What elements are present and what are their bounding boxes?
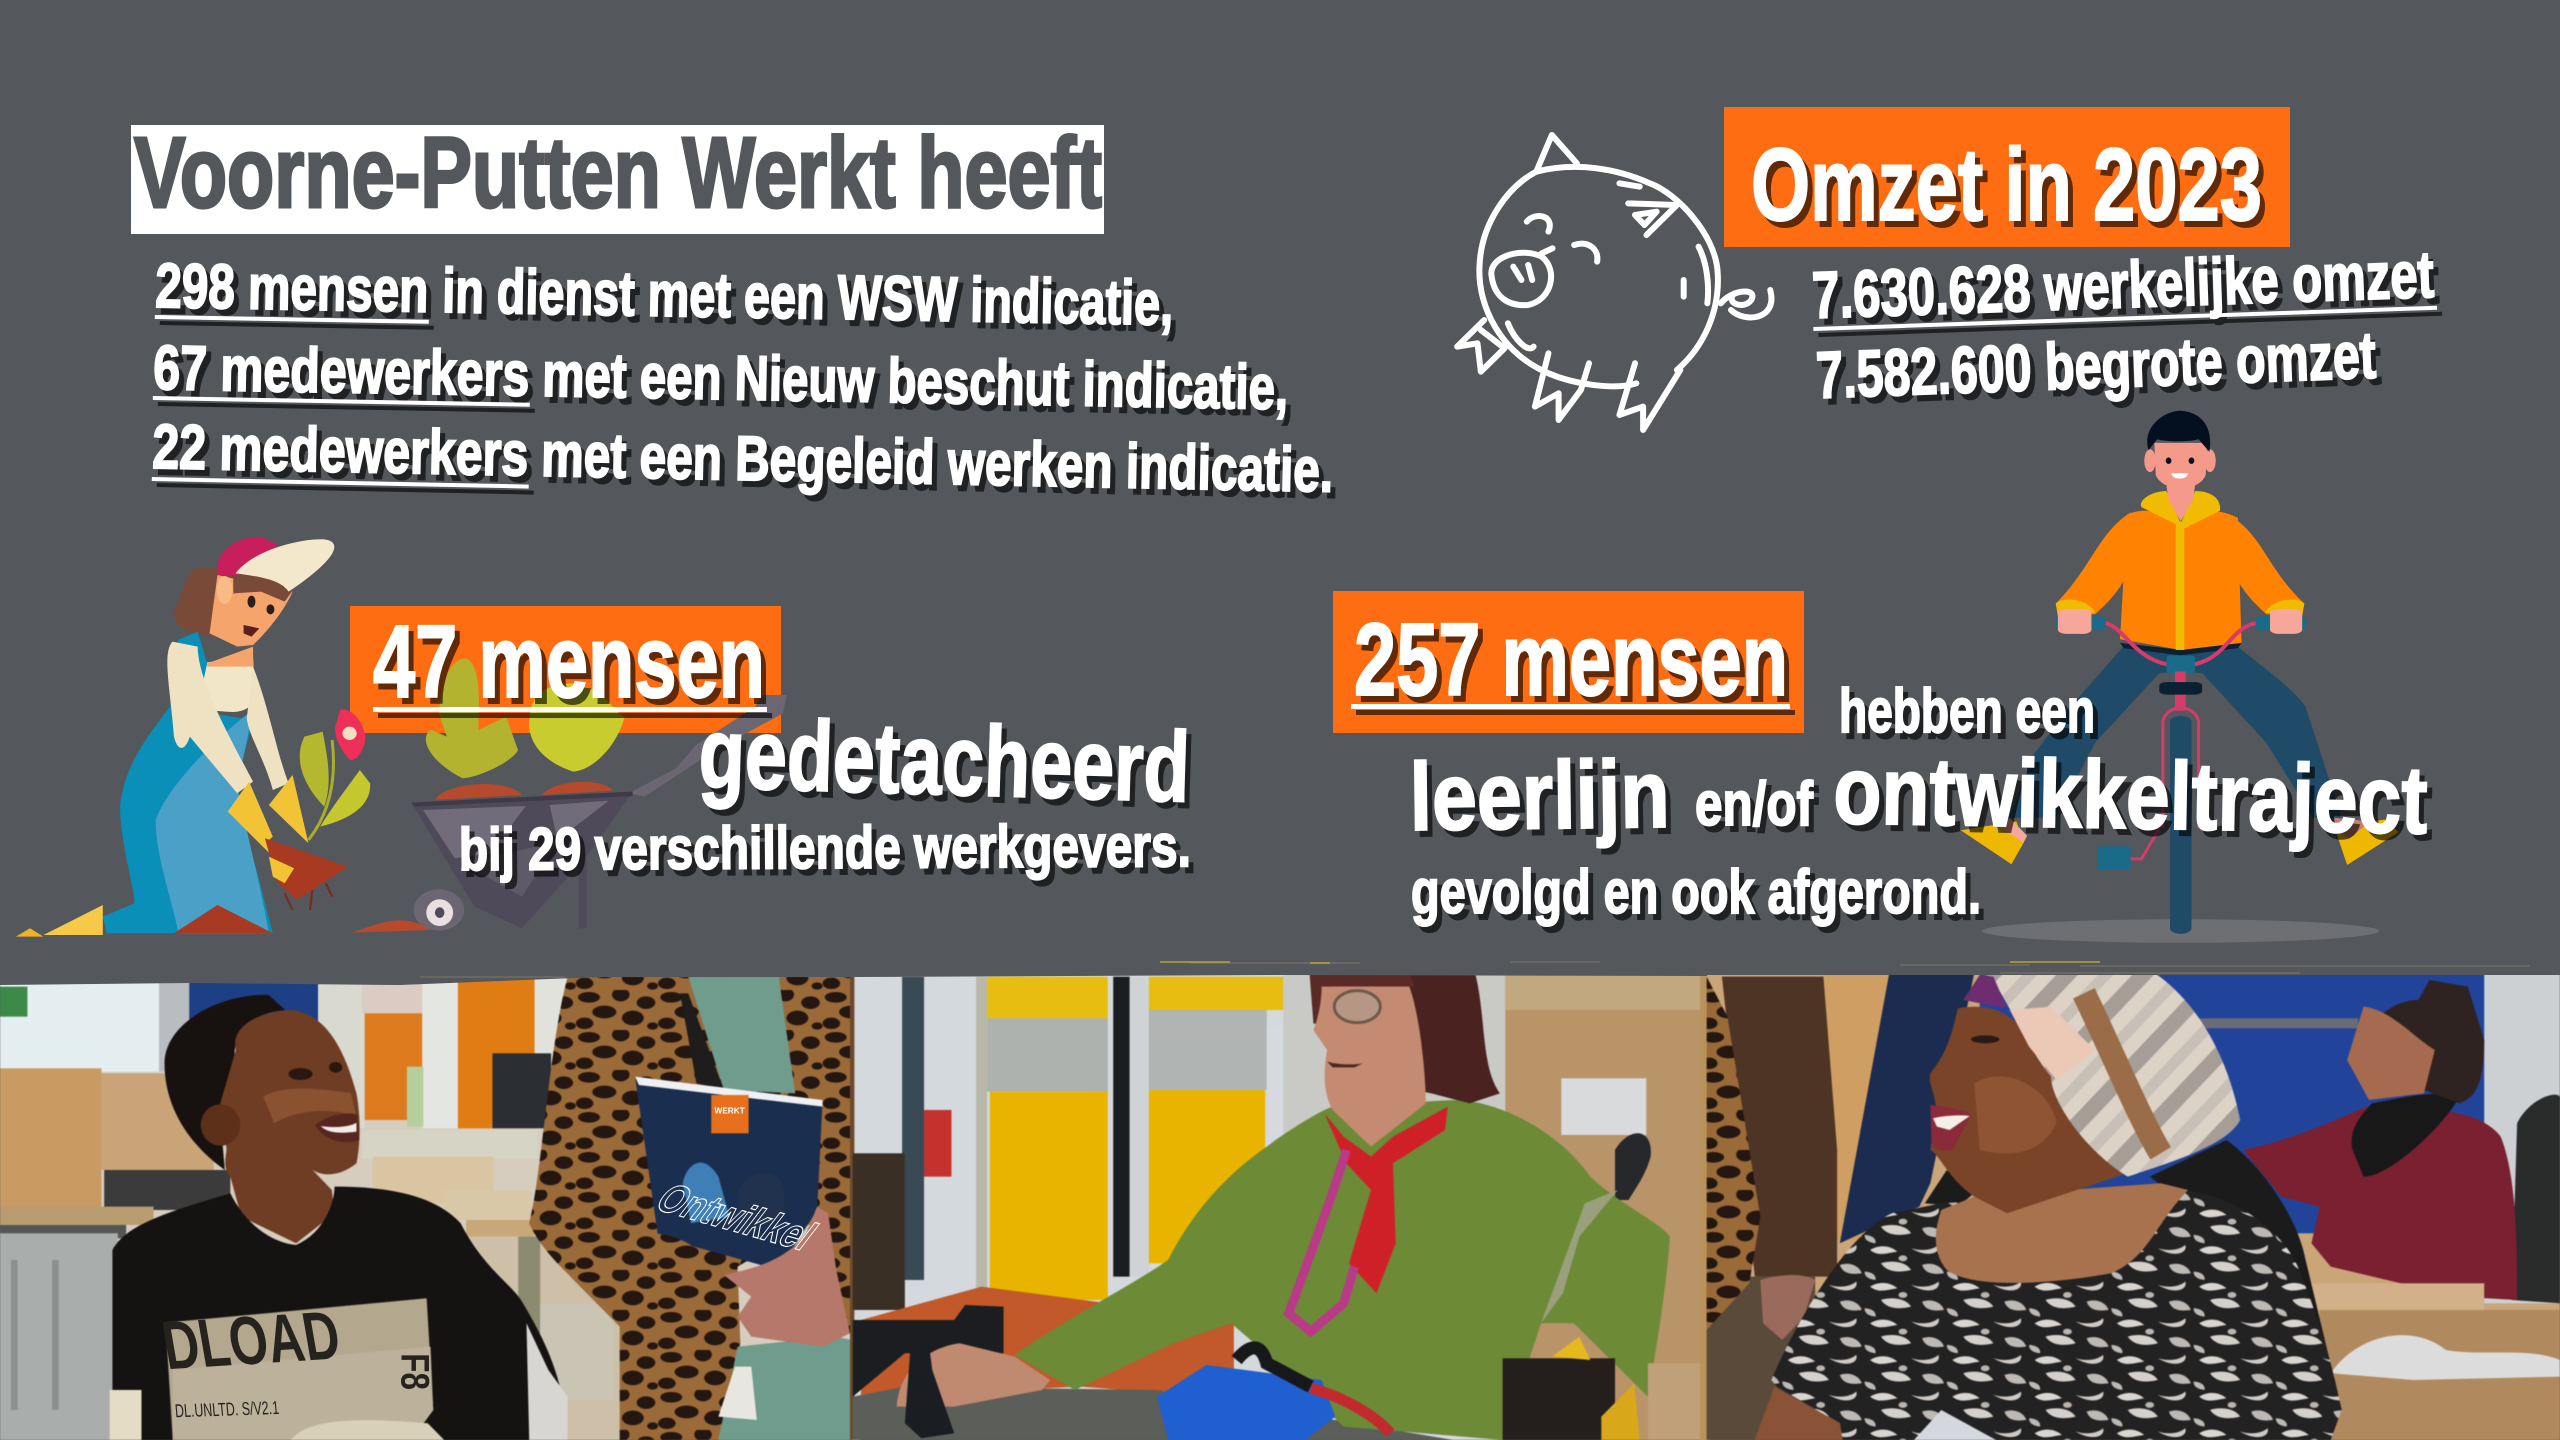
ontwikkeltraject: ontwikkeltraject — [1833, 737, 2428, 854]
line: 67 medewerkers — [153, 333, 1289, 423]
gardener figure — [16, 537, 334, 937]
heading: 47 mensen: 47 mensen — [373, 604, 765, 719]
line: 298 mensen — [155, 251, 1174, 339]
sweater print lettering: DL.UNLTD. S/V2.1 — [174, 1398, 280, 1422]
leerlijn: leerlijn — [1409, 741, 1670, 851]
jacket — [2056, 491, 2304, 655]
wheelbarrow — [352, 695, 787, 933]
revenue figures — [1811, 237, 2437, 412]
legs — [1961, 646, 2399, 865]
line: budgeted revenue: 7.582.600 begrote omzet — [1815, 318, 2377, 412]
hebben een: hebben een — [1839, 677, 2095, 746]
line: 67 medewerkers: 67 medewerkers — [153, 333, 530, 410]
line: 22 medewerkers — [152, 412, 1334, 506]
line: 67 medewerkers: met een Nieuw beschut indicatie, — [542, 340, 1289, 423]
head — [2144, 411, 2216, 521]
photo: man in black sweater and person holding magazine — [0, 977, 860, 1440]
panel: 257 mensen box — [1333, 591, 1804, 733]
handlebars and hands — [2056, 609, 2306, 829]
photo: smiling woman with headscarf — [1700, 970, 2560, 1440]
line: 298 mensen: in dienst met een WSW indicatie, — [442, 256, 1174, 339]
line: 298 mensen: 298 mensen — [155, 251, 429, 326]
title block: Voorne-Putten Werkt heeft — [134, 117, 1102, 229]
magazine cover lettering — [646, 1106, 827, 1259]
magazine cover lettering: WERKT — [715, 1106, 745, 1116]
staff counts text block — [152, 251, 1334, 506]
gevolgd line: gevolgd en ook afgerond. — [1411, 858, 1981, 927]
sweater print lettering: F8 — [393, 1353, 438, 1390]
photo strip — [0, 950, 2560, 1440]
en/of: en/of — [1695, 770, 1813, 839]
icon: piggy bank — [1457, 135, 1771, 430]
carrots and leaves — [426, 658, 625, 800]
line: 22 medewerkers: 22 medewerkers — [152, 412, 529, 490]
panel: 47 mensen box — [350, 606, 781, 733]
trajectory text block — [1409, 677, 2428, 927]
panel: revenue heading — [1724, 107, 2290, 247]
brushed top edge of photo strip — [0, 950, 2560, 985]
panel: 257 mensen box: 257 mensen — [1354, 602, 1788, 717]
bicycle rear parts — [2097, 716, 2191, 934]
line: 22 medewerkers: met een Begeleid werken indicatie. — [541, 420, 1334, 506]
photo: man in green sweater — [850, 973, 1710, 1440]
sweater print lettering: DLOAD — [157, 1297, 345, 1384]
magazine cover lettering: Ontwikkel — [646, 1176, 827, 1259]
sweater print lettering — [157, 1297, 438, 1422]
detachment text — [373, 604, 1191, 883]
panel: revenue heading: Omzet in 2023 — [1751, 127, 2262, 242]
employers line: bij 29 verschillende werkgevers. — [459, 812, 1191, 883]
illustration: gardener with wheelbarrow — [16, 537, 787, 937]
gedetacheerd: gedetacheerd — [697, 697, 1191, 824]
illustration: cyclist — [1961, 411, 2399, 943]
potted plant with flower — [265, 710, 370, 910]
